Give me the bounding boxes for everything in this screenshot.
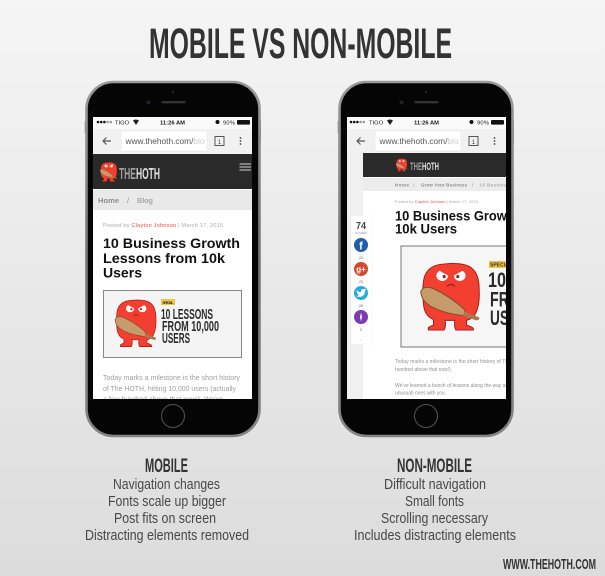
featured image: 10 <box>488 269 506 292</box>
post byline: Posted by Clayton Johnson | March 17, 2015 <box>395 199 479 204</box>
status bar: 11:26 AM <box>160 120 185 126</box>
icon: twitter: 28 <box>359 304 363 308</box>
site header with logo <box>93 154 252 189</box>
benefit list: mobile <box>85 477 249 544</box>
post paragraph: Today marks a milestone is the short history <box>103 375 241 382</box>
featured image: SPECIAL <box>162 301 174 305</box>
column: non-mobile <box>354 456 516 544</box>
post byline: Posted by Clayton Johnson | March 17, 2015 <box>103 223 223 229</box>
drawback list: non-mobile <box>354 477 516 544</box>
post title: Lessons from 10k <box>103 250 225 266</box>
post paragraph <box>103 374 240 399</box>
breadcrumb: Grow Your Business <box>421 182 468 188</box>
browser toolbar <box>93 129 252 154</box>
post title <box>396 210 506 234</box>
breadcrumb: Home <box>395 182 410 188</box>
featured image <box>104 290 242 358</box>
phone: non-mobile version <box>338 82 521 436</box>
post paragraph: a few hundred above that now!). We've <box>103 396 223 404</box>
browser toolbar: 1 <box>472 140 476 146</box>
status bar <box>350 120 504 125</box>
site header with logo: THEHOTH <box>410 161 439 173</box>
column heading: mobile: MOBILE <box>145 456 188 477</box>
breadcrumb: / <box>472 182 474 188</box>
benefit list: mobile: Distracting elements removed <box>85 528 249 544</box>
status bar: 90% <box>477 120 489 126</box>
browser toolbar: 1 <box>218 140 222 146</box>
drawback list: non-mobile: Includes distracting elements <box>354 528 516 544</box>
featured image: US <box>490 307 509 330</box>
post title: Users <box>103 264 142 280</box>
status bar: TIGO <box>115 120 130 126</box>
post paragraphs <box>395 359 511 396</box>
share sidebar: × <box>360 337 363 342</box>
status bar <box>96 120 250 125</box>
site header with logo: THEHOTH <box>119 166 160 183</box>
post title: 10k Users <box>395 220 457 236</box>
flare count: 74 <box>356 221 366 232</box>
featured image <box>400 246 506 348</box>
featured image: FROM 10,000 <box>162 318 219 335</box>
browser toolbar <box>347 129 506 153</box>
benefit list: mobile: Navigation changes <box>113 477 220 493</box>
browser toolbar: www.thehoth.com/ blo <box>378 137 459 146</box>
status bar: 11:26 AM <box>414 120 439 126</box>
drawback list: non-mobile: Small fonts <box>405 494 464 510</box>
drawback list: non-mobile: Difficult navigation <box>384 477 486 493</box>
status bar: TIGO <box>369 120 384 126</box>
flare count: FLARES <box>355 231 367 235</box>
benefit list: mobile: Fonts scale up bigger <box>108 494 226 510</box>
featured image: 10 LESSONS <box>161 306 213 323</box>
post title: 10 Business Growth <box>103 235 240 251</box>
icon: flare: 0 <box>360 328 362 332</box>
icon: google plus: 23 <box>359 280 363 284</box>
post paragraphs: hundred above that now!). <box>395 367 452 373</box>
breadcrumb: Home <box>98 196 119 205</box>
icon: facebook: f <box>359 240 363 252</box>
post title <box>104 238 240 278</box>
breadcrumb: Blog <box>137 196 153 205</box>
post paragraph: of The HOTH, hitting 10,000 users (actually <box>103 386 237 393</box>
site header with logo <box>363 153 506 177</box>
phone: mobile version <box>85 82 261 436</box>
icon: google plus: g+ <box>356 265 366 274</box>
breadcrumb <box>93 190 252 210</box>
post title: 10 Business Growth <box>395 208 519 224</box>
post paragraphs: unusual) ones with you. <box>395 390 446 396</box>
breadcrumb: / <box>127 196 130 205</box>
breadcrumb <box>363 178 510 191</box>
column: mobile <box>85 456 249 544</box>
status bar: 90% <box>223 120 235 126</box>
icon: facebook: 23 <box>359 256 363 260</box>
column heading: non-mobile: NON-MOBILE <box>397 456 472 477</box>
post paragraphs: We've learned a bunch of lessons along the way and <box>395 383 511 389</box>
featured image: SPECIAL <box>490 262 512 268</box>
post paragraphs: Today marks a milestone is the short history of The <box>395 359 511 365</box>
featured image: FR <box>490 288 509 312</box>
breadcrumb: / <box>413 182 415 188</box>
drawback list: non-mobile: Scrolling necessary <box>381 511 489 527</box>
breadcrumb: 10 Business <box>480 182 510 188</box>
featured image: USERS <box>162 330 190 347</box>
share sidebar <box>351 216 372 344</box>
icon: google plus <box>354 262 368 284</box>
browser toolbar: www.thehoth.com/ blo <box>124 137 205 146</box>
benefit list: mobile: Post fits on screen <box>114 511 216 527</box>
icon: facebook <box>354 238 368 260</box>
